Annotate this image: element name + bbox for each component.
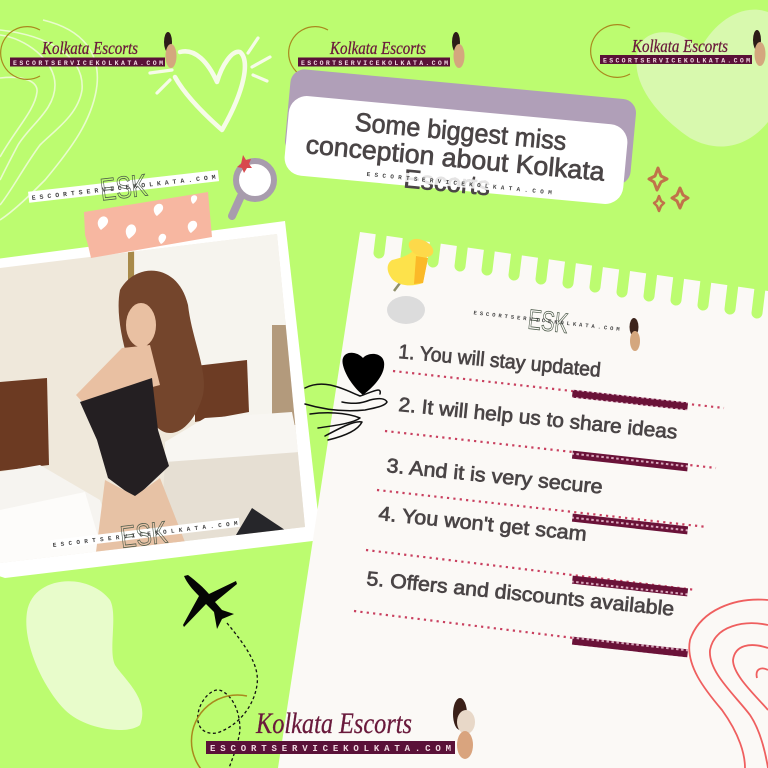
panel: notepaper	[278, 228, 768, 768]
logo top left	[1, 27, 177, 79]
logo figure	[164, 32, 176, 68]
logo bottom large	[191, 695, 475, 768]
logo top left: ESCORTSERVICEKOLKATA.COM	[13, 60, 163, 67]
logo script text: Kolkata Escorts	[255, 707, 412, 740]
icon: airplane with dashed path	[183, 575, 257, 768]
frame	[0, 221, 321, 578]
photo watermark: ESCORTSERVICEKOLKATA.COM	[52, 520, 238, 549]
logo script text: Kolkata Escorts	[41, 38, 138, 58]
logo figure	[753, 30, 766, 66]
logo arc	[191, 695, 247, 768]
panel: title	[283, 68, 637, 212]
photo watermark	[49, 506, 242, 563]
logo url bar	[600, 55, 752, 64]
logo url bar	[298, 58, 450, 66]
list item 4: 4. You won't get scam	[378, 503, 588, 546]
watermark left: ESK	[98, 167, 149, 207]
sparkle stars	[649, 168, 688, 211]
title text	[302, 102, 609, 212]
list item 1: 1. You will stay updated	[398, 341, 602, 382]
title white card	[283, 94, 629, 206]
logo bottom large: ESCORTSERVICEKOLKATA.COM	[210, 744, 451, 754]
list item 5: 5. Offers and discounts available	[366, 568, 675, 621]
list item 2	[385, 394, 716, 471]
bed	[165, 412, 300, 466]
red star	[237, 155, 252, 173]
person, simplified	[76, 271, 285, 560]
logo url bar	[206, 741, 455, 754]
title text: conception about Kolkata	[305, 129, 607, 187]
watermark left: ESCORTSERVICEKOLKATA.COM	[31, 174, 216, 202]
decorative red contour lines	[689, 600, 768, 768]
logo figure	[452, 32, 464, 68]
paper watermark: ESCORTSERVICEKOLKATA.COM	[473, 309, 621, 333]
list item 4	[366, 503, 696, 596]
logo top centre: ESCORTSERVICEKOLKATA.COM	[301, 60, 448, 67]
title text: Escorts	[402, 163, 492, 201]
washi tape	[84, 192, 212, 258]
logo arc	[591, 25, 630, 77]
list item 3: 3. And it is very secure	[386, 455, 604, 499]
list item 3	[377, 455, 707, 534]
logo arc	[1, 27, 40, 79]
paper watermark	[472, 297, 622, 345]
headboards	[0, 378, 49, 471]
title back card	[284, 68, 637, 186]
torn paper perforations	[379, 228, 760, 313]
icon: hand holding heart	[305, 353, 387, 440]
logo figure	[453, 698, 475, 759]
watermark figure	[630, 318, 640, 351]
logo script text: Kolkata Escorts	[329, 38, 426, 58]
photo watermark: ESK	[118, 514, 169, 555]
pale heart top right	[636, 10, 768, 146]
watermark left	[27, 159, 221, 216]
logo arc	[289, 27, 328, 79]
logo top right	[591, 25, 766, 77]
title watermark: ESCORTSERVICEKOLKATA.COM	[366, 171, 552, 196]
mirror icon	[232, 155, 274, 216]
decorative wavy lines top left	[0, 20, 97, 220]
paper sheet	[278, 232, 768, 768]
list item 5	[354, 568, 688, 657]
panel: photo frame	[0, 221, 321, 578]
tape hearts	[98, 195, 197, 244]
list item 1	[393, 341, 724, 410]
shoe	[236, 508, 284, 535]
pale heart bottom left	[26, 581, 142, 730]
logo url bar	[10, 58, 165, 66]
title text: Some biggest miss	[354, 107, 568, 156]
list item 2: 2. It will help us to share ideas	[398, 394, 678, 444]
logo top centre	[289, 27, 464, 79]
logo script text: Kolkata Escorts	[631, 36, 728, 56]
logo top right: ESCORTSERVICEKOLKATA.COM	[603, 58, 750, 64]
outline heart with rays	[150, 38, 270, 130]
pushpin	[387, 235, 436, 324]
paper watermark: ESK	[526, 304, 570, 339]
